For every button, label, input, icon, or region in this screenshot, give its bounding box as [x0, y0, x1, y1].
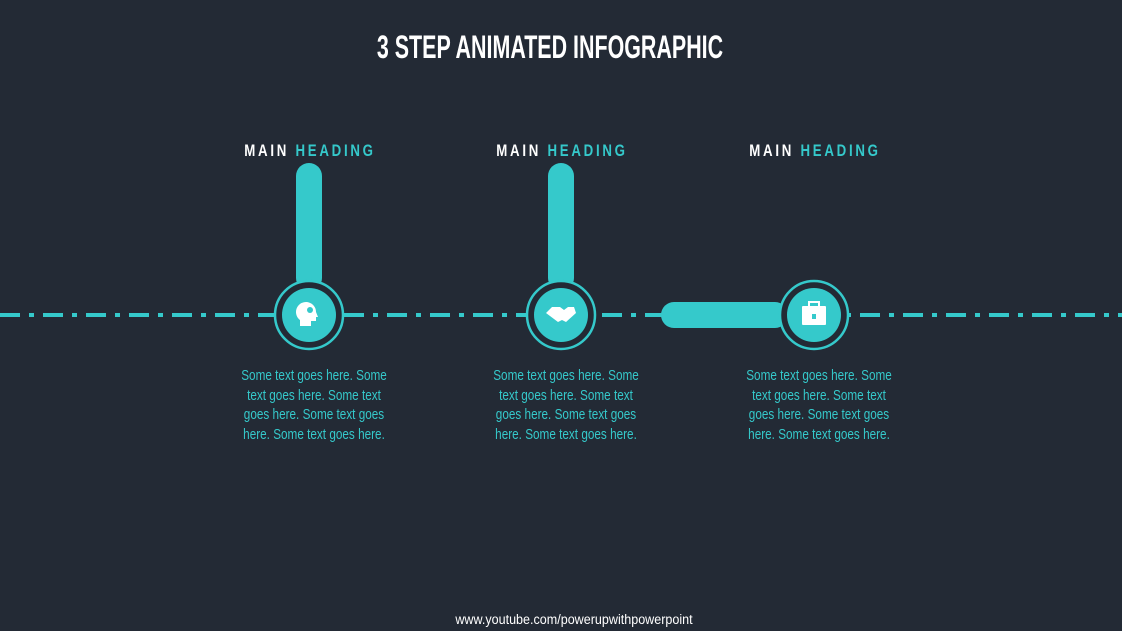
step 2 bar — [548, 163, 574, 291]
footer url: www.youtube.com/powerupwithpowerpoint — [455, 612, 693, 627]
text 1: Some text goes here. Some — [241, 368, 387, 384]
text 3 — [746, 368, 892, 443]
text 3: text goes here. Some text — [752, 388, 886, 404]
heading 1: MAIN HEADING — [244, 141, 376, 160]
step 2 node — [527, 281, 595, 349]
icon: briefcase — [802, 302, 826, 325]
text 3: here. Some text goes here. — [748, 427, 890, 443]
step 3 node — [780, 281, 848, 349]
text 2: text goes here. Some text — [499, 388, 633, 404]
text 2: Some text goes here. Some — [493, 368, 639, 384]
text 2: goes here. Some text goes — [496, 407, 636, 423]
text 2: here. Some text goes here. — [495, 427, 637, 443]
step 1 node — [275, 281, 343, 349]
step 3 bar — [661, 302, 788, 328]
text 3: Some text goes here. Some — [746, 368, 892, 384]
text 1: text goes here. Some text — [247, 388, 381, 404]
text 1: here. Some text goes here. — [243, 427, 385, 443]
text 1 — [241, 368, 387, 443]
text 1: goes here. Some text goes — [244, 407, 384, 423]
dashed timeline — [0, 313, 1122, 317]
text 3: goes here. Some text goes — [749, 407, 889, 423]
icon: head with gears — [296, 302, 318, 326]
heading 2: MAIN HEADING — [496, 141, 628, 160]
text 2 — [493, 368, 639, 443]
title: 3 STEP ANIMATED INFOGRAPHIC — [377, 29, 723, 65]
step 1 bar — [296, 163, 322, 291]
icon: handshake — [546, 307, 576, 322]
heading 3: MAIN HEADING — [749, 141, 881, 160]
